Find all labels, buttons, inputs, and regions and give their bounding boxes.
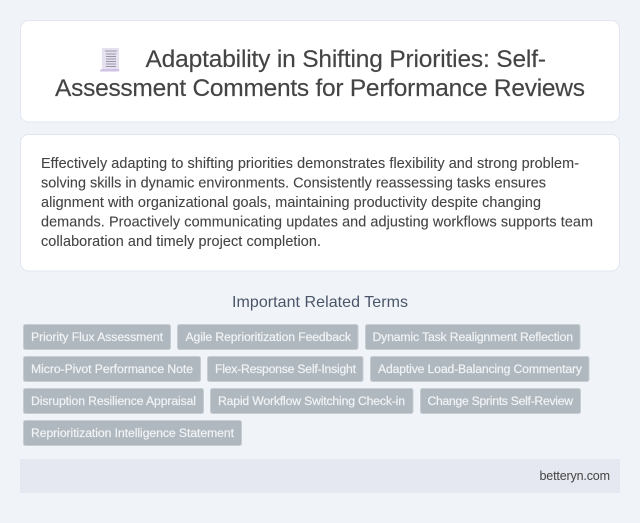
panel: description [20, 134, 620, 271]
text block: description: demands. Proactively communicating updates and adjusting workflows supports team [41, 214, 593, 230]
tag: Adaptive Load-Balancing Commentary [378, 362, 583, 376]
tag: Rapid Workflow Switching Check-in [218, 394, 405, 408]
tag [208, 356, 363, 382]
text block: description: collaboration and timely project completion. [41, 234, 321, 250]
tag [178, 324, 358, 350]
tag: Micro-Pivot Performance Note [31, 362, 193, 376]
panel: title card [20, 20, 620, 122]
tag: Agile Reprioritization Feedback [186, 330, 352, 344]
footer [20, 459, 620, 493]
tag [366, 324, 580, 350]
title: Adaptability in Shifting Priorities: Self- [146, 46, 546, 73]
title [55, 46, 585, 102]
tag: Priority Flux Assessment [31, 330, 164, 344]
text block: description: solving skills in dynamic environments. Consistently reassessing tasks ensures [41, 176, 546, 192]
tag [24, 420, 242, 446]
tag: Flex-Response Self-Insight [215, 362, 357, 376]
heading: related terms: Important Related Terms [232, 294, 408, 311]
text block: description: alignment with organizational goals, maintaining productivity despite changing [41, 195, 541, 211]
tag list [24, 324, 589, 446]
tag [24, 324, 170, 350]
tag [24, 388, 204, 414]
tag: Dynamic Task Realignment Reflection [372, 330, 573, 344]
footer text: betteryn.com [540, 469, 610, 483]
text block: description: Effectively adapting to shifting priorities demonstrates flexibility and strong problem- [41, 156, 579, 172]
tag: Change Sprints Self-Review [428, 394, 573, 408]
tag [370, 356, 589, 382]
icon: document scroll [100, 48, 120, 72]
text block: description [41, 156, 593, 250]
tag: Reprioritization Intelligence Statement [31, 426, 235, 440]
tag: Disruption Resilience Appraisal [31, 394, 196, 408]
tag [24, 356, 200, 382]
tag [420, 388, 580, 414]
tag [210, 388, 413, 414]
title: Assessment Comments for Performance Reviews [55, 75, 585, 102]
